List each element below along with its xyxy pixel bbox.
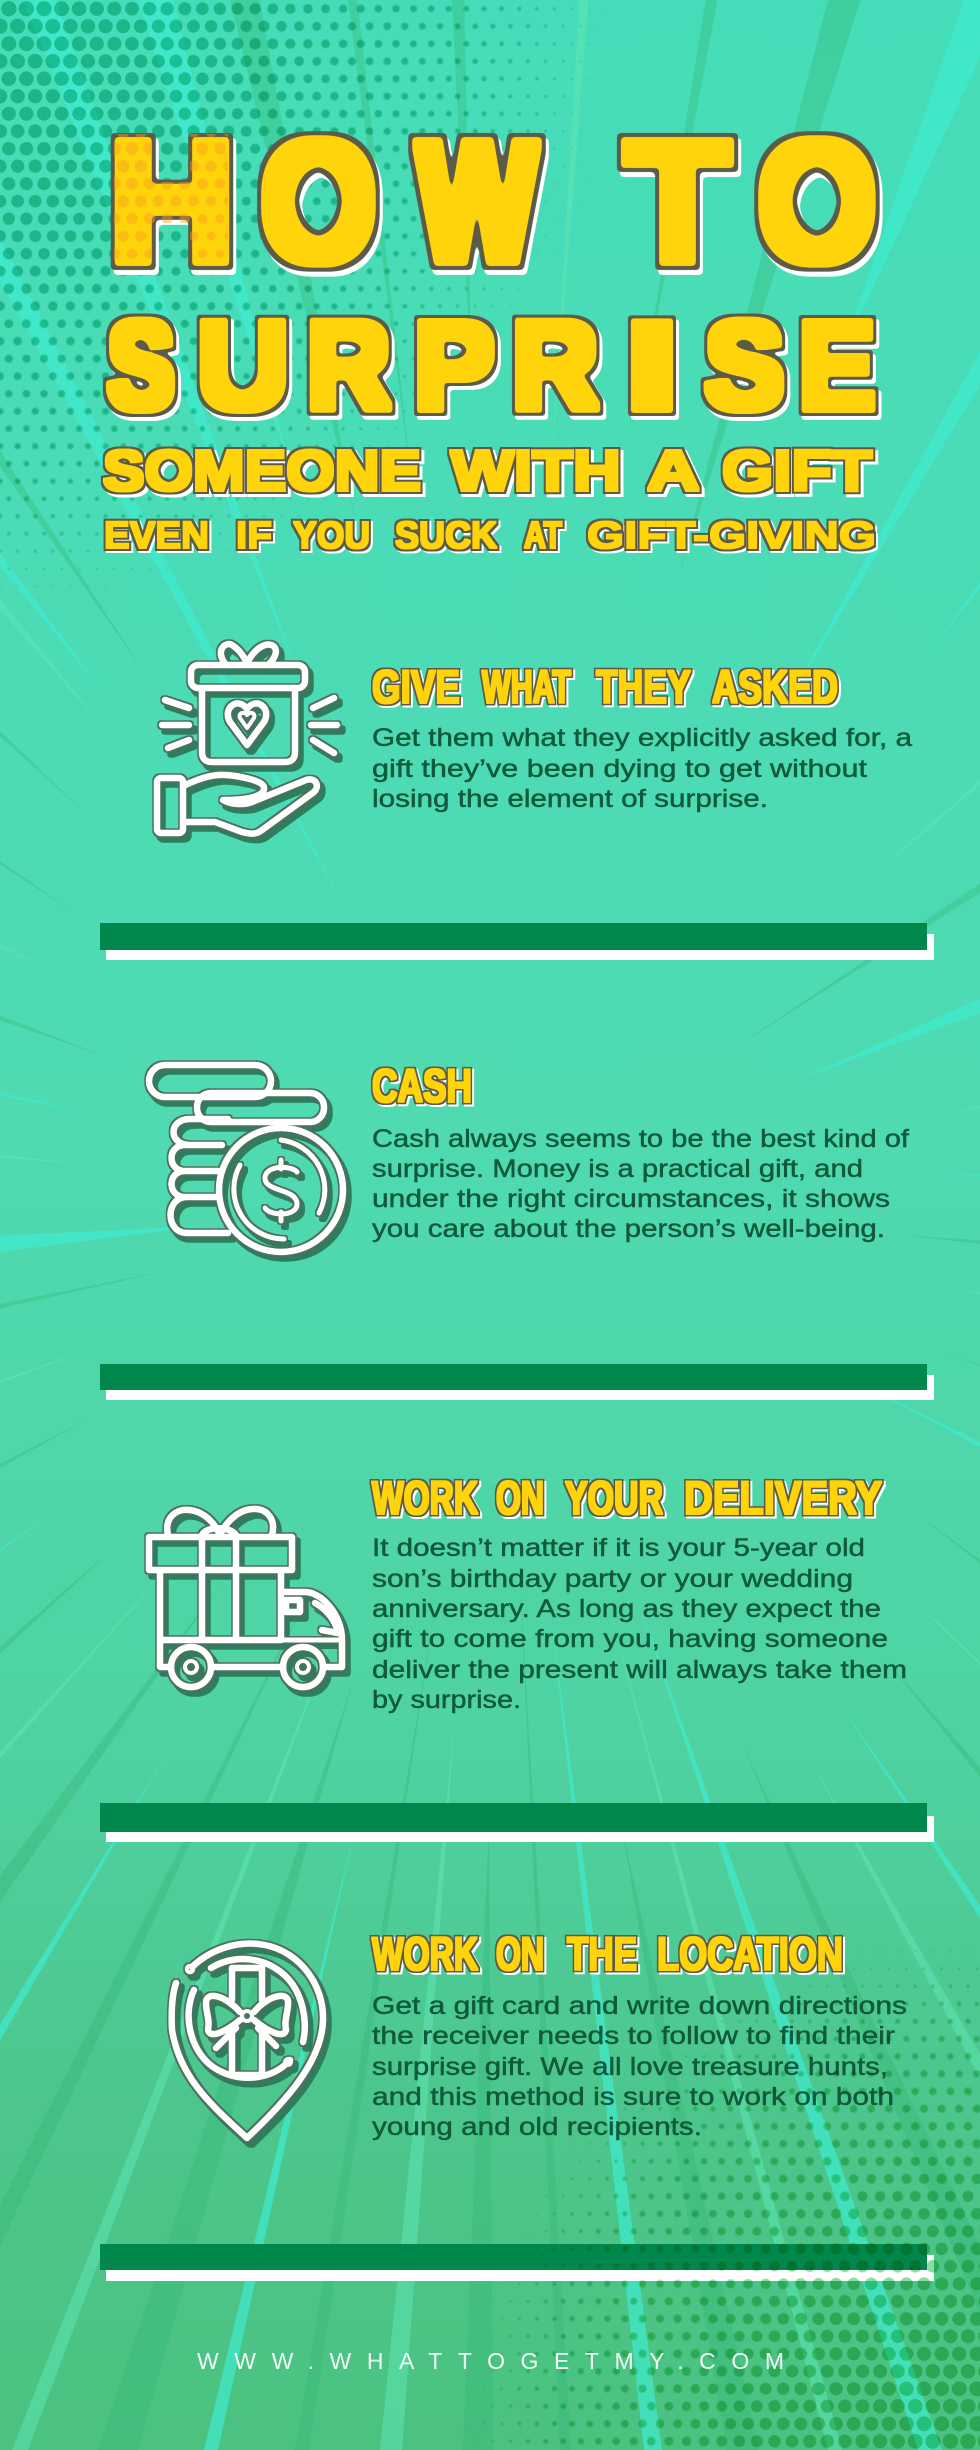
panel: cash [100, 1059, 934, 1400]
body text [372, 1125, 909, 1243]
title line: SURPRISE: S [108, 298, 174, 435]
body text: son’s birthday party or your wedding [372, 1565, 853, 1593]
divider bar [100, 2244, 934, 2281]
body text: gift they’ve been dying to get without [372, 755, 867, 783]
title line: HOW TO: T [625, 107, 730, 297]
body text: under the right circumstances, it shows [372, 1185, 890, 1213]
divider bar [100, 1364, 934, 1400]
title line: HOW TO: W [418, 107, 536, 297]
body text [372, 724, 912, 813]
icon: map pin with gift bow [172, 1944, 323, 2138]
heading: WORK [372, 1927, 478, 1980]
background: top-left halftone dots [0, 1, 608, 604]
body text [372, 1992, 907, 2141]
body text: you care about the person’s well-being. [372, 1215, 885, 1243]
title line: SURPRISE: R [512, 298, 598, 435]
heading: CASH [372, 1059, 472, 1112]
title line: EVEN IF YOU SUCK AT GIFT-GIVING: EVEN [104, 515, 209, 557]
footer url: WWW.WHATTOGETMY.COM [197, 2348, 784, 2374]
title line: HOW TO: O [758, 107, 876, 297]
body text: and this method is sure to work on both [372, 2083, 894, 2111]
body text: young and old recipients. [372, 2113, 702, 2141]
panel: work on your delivery [100, 1471, 934, 1842]
title line: EVEN IF YOU SUCK AT GIFT-GIVING: YOU [293, 515, 370, 557]
heading: LOCATION [657, 1927, 843, 1980]
title line: SURPRISE: U [197, 298, 289, 435]
body text: surprise. Money is a practical gift, and [372, 1155, 863, 1183]
heading: DELIVERY [684, 1471, 882, 1524]
title line: SURPRISE: P [414, 298, 494, 435]
heading: ON [496, 1927, 544, 1980]
title line: SOMEONE WITH A GIFT: WITH [451, 439, 621, 503]
body text: Get a gift card and write down directions [372, 1992, 907, 2020]
title line: HOW TO: O [261, 107, 376, 297]
title line: SOMEONE WITH A GIFT: A [647, 439, 698, 503]
title line: EVEN IF YOU SUCK AT GIFT-GIVING: IF [236, 515, 272, 557]
heading: YOUR [565, 1471, 663, 1524]
heading: WHAT [482, 660, 571, 713]
title line: SURPRISE: S [705, 298, 784, 435]
title line: EVEN IF YOU SUCK AT GIFT-GIVING: SUCK [395, 515, 498, 557]
body text: the receiver needs to follow to find their [372, 2022, 895, 2050]
body text: Cash always seems to be the best kind of [372, 1125, 909, 1153]
heading: ASKED [712, 660, 838, 713]
title line: EVEN IF YOU SUCK AT GIFT-GIVING: AT [524, 515, 562, 557]
body text: by surprise. [372, 1686, 521, 1714]
heading: THE [567, 1927, 637, 1980]
heading: THEY [596, 660, 690, 713]
icon: coin stack with dollar [149, 1065, 343, 1252]
body text [372, 1534, 907, 1714]
panel: work on the location [100, 1927, 934, 2281]
title line: SURPRISE: I [621, 298, 683, 435]
title [103, 107, 876, 557]
title line: SURPRISE: R [307, 298, 390, 435]
panel: give what they asked [100, 644, 934, 960]
body text: gift to come from you, having someone [372, 1625, 888, 1653]
heading: GIVE [372, 660, 460, 713]
title line: EVEN IF YOU SUCK AT GIFT-GIVING: GIFT-GIVING [587, 515, 876, 557]
title line: HOW TO: H [109, 107, 235, 297]
body text: surprise gift. We all love treasure hunts, [372, 2053, 888, 2081]
divider bar [100, 923, 934, 960]
title line: SOMEONE WITH A GIFT: GIFT [722, 439, 872, 503]
body text: Get them what they explicitly asked for, a [372, 724, 912, 752]
body text: deliver the present will always take them [372, 1656, 907, 1684]
body text: losing the element of surprise. [372, 785, 768, 813]
title line: SURPRISE: E [799, 298, 875, 435]
body text: anniversary. As long as they expect the [372, 1595, 881, 1623]
divider bar [100, 1803, 934, 1842]
icon: delivery truck with gift [149, 1509, 342, 1687]
body text: It doesn’t matter if it is your 5-year old [372, 1534, 865, 1562]
icon: gift on open hand [157, 644, 337, 834]
title line: SOMEONE WITH A GIFT: SOMEONE [103, 439, 421, 503]
halftone tint over the letter H [114, 134, 228, 260]
heading: WORK [372, 1471, 478, 1524]
heading: ON [496, 1471, 544, 1524]
background: bottom-right halftone dots [466, 1934, 980, 2449]
